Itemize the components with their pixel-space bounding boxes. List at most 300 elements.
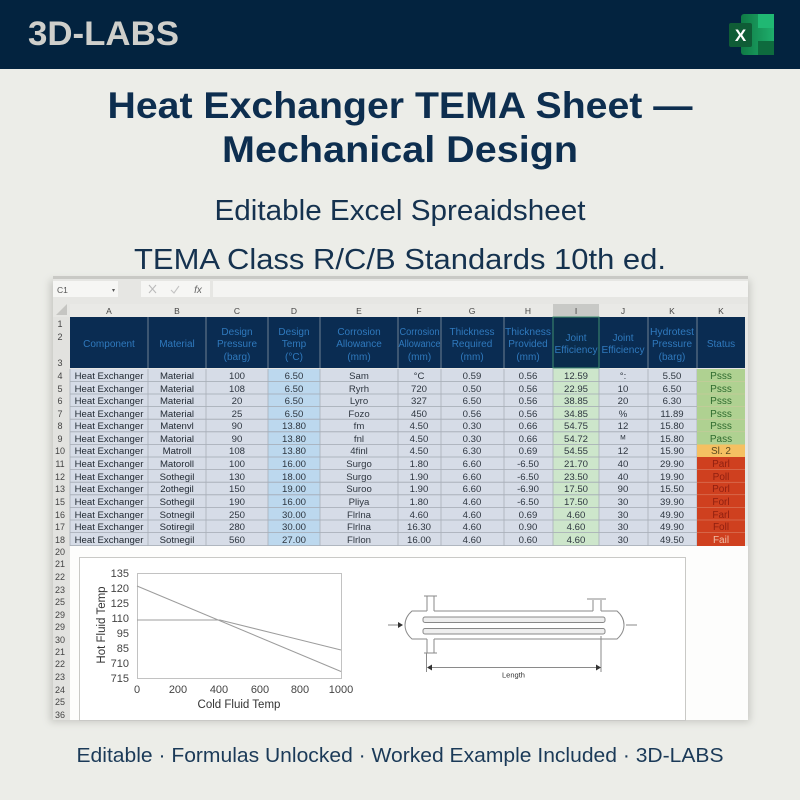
- row numbers: 4: [57, 371, 63, 381]
- status column: Psss: [710, 371, 732, 382]
- row 13: 1.90: [410, 484, 428, 495]
- row numbers: 13: [55, 484, 65, 494]
- row 13: 17.50: [564, 484, 588, 495]
- status column: Farl: [712, 510, 730, 521]
- row 12: Surgo: [346, 472, 372, 483]
- row 8: 0.30: [463, 421, 481, 432]
- row 5: [75, 384, 681, 395]
- table header row: [70, 317, 745, 368]
- row numbers: 22: [55, 572, 65, 582]
- row numbers: 1: [57, 319, 63, 329]
- row 16: Heat Exchanger: [75, 510, 144, 521]
- y axis labels: 120: [111, 583, 129, 595]
- row 8: [75, 421, 684, 432]
- table header row: Material: [159, 339, 195, 350]
- row 13: [75, 484, 684, 495]
- row 16: 250: [229, 510, 245, 521]
- row 16: 49.90: [660, 510, 684, 521]
- row 6: Lyro: [350, 396, 368, 407]
- panel: spreadsheet: [50, 276, 750, 722]
- x axis labels: 600: [251, 684, 269, 696]
- row 15: [75, 497, 684, 508]
- row 11: 40: [618, 459, 628, 470]
- row 4: °:: [620, 371, 626, 382]
- row 16: Flrlna: [347, 510, 372, 521]
- row 12: 18.00: [282, 472, 306, 483]
- row numbers: 8: [57, 421, 63, 431]
- table header row: (mm): [347, 352, 371, 363]
- table header row: Corrosion: [337, 327, 381, 338]
- row 4: [75, 371, 681, 382]
- table header row: Status: [707, 339, 735, 350]
- row numbers: 29: [55, 622, 65, 632]
- row 18: 16.00: [407, 535, 431, 546]
- y axis labels: [111, 568, 129, 685]
- column letters: K: [718, 306, 724, 316]
- row 17: 16.30: [407, 522, 431, 533]
- row 12: Sothegil: [160, 472, 194, 483]
- row 8: 90: [232, 421, 242, 432]
- row 4: 6.50: [285, 371, 303, 382]
- row 13: 150: [229, 484, 245, 495]
- row 16: 0.69: [519, 510, 537, 521]
- row 18: 30: [618, 535, 628, 546]
- column letters: A: [106, 306, 112, 316]
- row numbers: 23: [55, 672, 65, 682]
- row 18: 4.60: [567, 535, 585, 546]
- row 7: 0.56: [519, 409, 537, 420]
- row numbers: 23: [55, 585, 65, 595]
- row 8: 15.80: [660, 421, 684, 432]
- row 18: 0.60: [519, 535, 537, 546]
- row 10: 15.90: [660, 446, 684, 457]
- row 6: [75, 396, 681, 407]
- column letters: [56, 304, 748, 317]
- row 11: [75, 459, 684, 470]
- heat exchanger diagram: [388, 596, 637, 680]
- row 10: 4.50: [410, 446, 428, 457]
- row 13: Suroo: [346, 484, 372, 495]
- table header row: Efficiency: [554, 345, 598, 356]
- row 18: 27.00: [282, 535, 306, 546]
- row numbers: 18: [55, 535, 65, 545]
- row 7: Material: [160, 409, 194, 420]
- row 11: 21.70: [564, 459, 588, 470]
- row 5: 10: [618, 384, 628, 395]
- row 13: 15.50: [660, 484, 684, 495]
- status column: Psss: [710, 409, 732, 420]
- row 16: 4.60: [463, 510, 481, 521]
- row 15: 4.60: [463, 497, 481, 508]
- row 15: 17.50: [564, 497, 588, 508]
- row 11: Matoroll: [160, 459, 194, 470]
- row 16: 4.60: [567, 510, 585, 521]
- table header row: Design: [278, 327, 310, 338]
- y axis labels: 715: [111, 673, 129, 685]
- column letters: G: [469, 306, 475, 316]
- row 15: 39.90: [660, 497, 684, 508]
- row 18: Sotnegil: [160, 535, 194, 546]
- row 17: 30.00: [282, 522, 306, 533]
- length label: Length: [502, 670, 525, 680]
- row 7: 6.50: [285, 409, 303, 420]
- row 4: Sam: [349, 371, 369, 382]
- row numbers: 11: [55, 459, 65, 469]
- row 8: 4.50: [410, 421, 428, 432]
- table header row: (barg): [224, 352, 250, 363]
- shell: [405, 611, 624, 639]
- status column: Psss: [710, 384, 732, 395]
- row 8: 13.80: [282, 421, 306, 432]
- row 13: 6.60: [463, 484, 481, 495]
- row 17: 30: [618, 522, 628, 533]
- row 5: Ryrh: [349, 384, 369, 395]
- x axis labels: 0: [134, 684, 140, 696]
- logo text: 3D-LABS: [28, 15, 179, 53]
- row numbers: 25: [55, 697, 65, 707]
- row 7: 25: [232, 409, 242, 420]
- row 12: 23.50: [564, 472, 588, 483]
- row numbers: 25: [55, 597, 65, 607]
- row 12: -6.50: [517, 472, 539, 483]
- row 9: 0.30: [463, 434, 481, 445]
- row 15: Sothegil: [160, 497, 194, 508]
- table header row: (barg): [659, 352, 685, 363]
- row 5: 22.95: [564, 384, 588, 395]
- row numbers: [53, 317, 70, 720]
- row 17: Heat Exchanger: [75, 522, 144, 533]
- row 8: 12: [618, 421, 628, 432]
- row 15: Heat Exchanger: [75, 497, 144, 508]
- row numbers: 15: [55, 497, 65, 507]
- table header row: Pressure: [217, 339, 257, 350]
- row 12: 1.90: [410, 472, 428, 483]
- row 11: 1.80: [410, 459, 428, 470]
- column letters: E: [356, 306, 362, 316]
- row 12: [75, 472, 684, 483]
- status column: Foll: [713, 522, 729, 533]
- row 13: 19.00: [282, 484, 306, 495]
- table header row: Design: [221, 327, 253, 338]
- row 10: 0.69: [519, 446, 537, 457]
- row 16: Sotnegil: [160, 510, 194, 521]
- row 18: [75, 535, 684, 546]
- row 10: 12: [618, 446, 628, 457]
- row 4: 0.59: [463, 371, 481, 382]
- row 17: 4.60: [567, 522, 585, 533]
- row 13: -6.90: [517, 484, 539, 495]
- row 6: 6.30: [663, 396, 681, 407]
- row 6: Heat Exchanger: [75, 396, 144, 407]
- chart lines: [137, 586, 341, 672]
- row 10: 54.55: [564, 446, 588, 457]
- subtitle: Editable Excel Spreaidsheet: [214, 195, 586, 227]
- footer line: Editable · Formulas Unlocked · Worked Example Included · 3D-LABS: [76, 744, 724, 767]
- row 9: 15.80: [660, 434, 684, 445]
- row 11: -6.50: [517, 459, 539, 470]
- row 10: 6.30: [463, 446, 481, 457]
- status column: Sl. 2: [711, 446, 731, 457]
- column letters: F: [416, 306, 422, 316]
- row numbers: 24: [55, 685, 65, 695]
- table header row: Component: [83, 339, 135, 350]
- row 7: 34.85: [564, 409, 588, 420]
- table header row: Pressure: [652, 339, 692, 350]
- table header row: Thickness: [505, 327, 551, 338]
- formula bar: fx: [194, 285, 203, 296]
- status column: Psss: [710, 421, 732, 432]
- row 7: 0.56: [463, 409, 481, 420]
- nozzles: [424, 596, 606, 653]
- y axis labels: 125: [111, 598, 129, 610]
- row 5: 0.50: [463, 384, 481, 395]
- row 5: 6.50: [285, 384, 303, 395]
- row 10: 13.80: [282, 446, 306, 457]
- row 13: 2othegil: [160, 484, 194, 495]
- row 8: Matenvl: [160, 421, 194, 432]
- icon: excel logo: X: [735, 26, 747, 45]
- row numbers: 9: [57, 434, 63, 444]
- row 11: 6.60: [463, 459, 481, 470]
- column letters: D: [291, 306, 297, 316]
- x axis labels: 800: [291, 684, 309, 696]
- table header row: Thickness: [449, 327, 495, 338]
- y axis labels: 95: [117, 628, 129, 640]
- row 10: 4finl: [350, 446, 368, 457]
- row 4: 100: [229, 371, 245, 382]
- row 6: Material: [160, 396, 194, 407]
- status column: Psss: [710, 396, 732, 407]
- y axis labels: 110: [111, 613, 129, 625]
- standards line: TEMA Class R/C/B Standards 10th ed.: [134, 244, 666, 276]
- row 11: 16.00: [282, 459, 306, 470]
- x axis labels: 1000: [329, 684, 353, 696]
- row 11: Surgo: [346, 459, 372, 470]
- row numbers: 12: [55, 472, 65, 482]
- row numbers: 10: [55, 446, 65, 456]
- row 5: 108: [229, 384, 245, 395]
- status column: Poll: [713, 472, 729, 483]
- row numbers: 21: [55, 559, 65, 569]
- row 4: Material: [160, 371, 194, 382]
- row 9: 0.66: [519, 434, 537, 445]
- row 17: Sotiregil: [160, 522, 194, 533]
- row 15: -6.50: [517, 497, 539, 508]
- row 13: Heat Exchanger: [75, 484, 144, 495]
- row 6: 0.56: [519, 396, 537, 407]
- row 7: 450: [411, 409, 427, 420]
- row 9: Heat Exchanger: [75, 434, 144, 445]
- row 5: Heat Exchanger: [75, 384, 144, 395]
- y axis labels: 135: [111, 568, 129, 580]
- row 4: 5.50: [663, 371, 681, 382]
- row 18: Heat Exchanger: [75, 535, 144, 546]
- formula bar: [53, 281, 748, 297]
- row numbers: 29: [55, 610, 65, 620]
- row 9: 54.72: [564, 434, 588, 445]
- tubes: [423, 617, 605, 622]
- row 10: 108: [229, 446, 245, 457]
- x axis labels: [134, 684, 353, 696]
- length dimension: [426, 636, 601, 672]
- row 8: 54.75: [564, 421, 588, 432]
- panel: chart and diagram: [80, 558, 686, 720]
- row 18: Flrlon: [347, 535, 371, 546]
- row 9: 4.50: [410, 434, 428, 445]
- row 6: 6.50: [285, 396, 303, 407]
- table header row: (°C): [285, 352, 303, 363]
- table header row: Efficiency: [602, 345, 644, 356]
- row 9: 13.80: [282, 434, 306, 445]
- row numbers: 3: [57, 358, 63, 368]
- row 16: 30.00: [282, 510, 306, 521]
- flow arrows: [388, 624, 637, 626]
- row 9: fnl: [354, 434, 364, 445]
- row 5: 0.56: [519, 384, 537, 395]
- row 15: 30: [618, 497, 628, 508]
- icon: excel logo: [729, 14, 774, 55]
- row 11: 100: [229, 459, 245, 470]
- row 17: [75, 522, 684, 533]
- row numbers: 21: [55, 647, 65, 657]
- row 10: [75, 446, 684, 457]
- row 17: 280: [229, 522, 245, 533]
- status column: Forl: [712, 497, 730, 508]
- row 17: 0.90: [519, 522, 537, 533]
- row 7: [75, 409, 684, 420]
- row numbers: 20: [55, 547, 65, 557]
- table header row: (mm): [516, 352, 540, 363]
- status column: Fail: [713, 535, 729, 546]
- row 12: 6.60: [463, 472, 481, 483]
- column letters: K: [669, 306, 675, 316]
- table data rows: [70, 369, 745, 546]
- status column: Pass: [710, 434, 732, 445]
- row 5: Material: [160, 384, 194, 395]
- row 7: 11.89: [660, 409, 684, 420]
- row 10: Heat Exchanger: [75, 446, 144, 457]
- row 7: Heat Exchanger: [75, 409, 144, 420]
- status column: Parl: [712, 459, 730, 470]
- row numbers: 5: [57, 384, 63, 394]
- row 9: Matorial: [160, 434, 194, 445]
- row 15: Pliya: [349, 497, 370, 508]
- x axis labels: 400: [210, 684, 228, 696]
- header band: [0, 0, 800, 69]
- status column: [697, 369, 745, 546]
- title: Mechanical Design: [222, 129, 578, 170]
- row numbers: 36: [55, 710, 65, 720]
- row 13: 90: [618, 484, 628, 495]
- row 12: 19.90: [660, 472, 684, 483]
- table header row: (mm): [460, 352, 484, 363]
- row 11: Heat Exchanger: [75, 459, 144, 470]
- row 17: 4.60: [463, 522, 481, 533]
- row 7: %: [619, 409, 628, 420]
- row 4: 12.59: [564, 371, 588, 382]
- y axis labels: 710: [111, 658, 129, 670]
- row numbers: 22: [55, 659, 65, 669]
- row numbers: 7: [57, 409, 63, 419]
- row 12: 40: [618, 472, 628, 483]
- row 8: fm: [354, 421, 364, 432]
- column letters: B: [174, 306, 180, 316]
- x axis labels: 200: [169, 684, 187, 696]
- table header row: Required: [452, 339, 492, 350]
- row 6: 6.50: [463, 396, 481, 407]
- row 18: 560: [229, 535, 245, 546]
- row numbers: 17: [55, 522, 65, 532]
- title: [108, 85, 692, 170]
- table header row: Joint: [612, 333, 634, 344]
- line chart: [96, 568, 353, 711]
- row 4: Heat Exchanger: [75, 371, 144, 382]
- column letters: C: [234, 306, 240, 316]
- row 17: 49.90: [660, 522, 684, 533]
- row 9: [75, 434, 684, 445]
- row 15: 190: [229, 497, 245, 508]
- row 7: Fozo: [348, 409, 370, 420]
- row 18: 4.60: [463, 535, 481, 546]
- row 6: 20: [232, 396, 242, 407]
- row 4: 0.56: [519, 371, 537, 382]
- row 4: °C: [414, 371, 424, 382]
- row numbers: 2: [57, 332, 63, 342]
- title: Heat Exchanger TEMA Sheet —: [108, 85, 692, 126]
- row 16: 30: [618, 510, 628, 521]
- row 9: ᴹ: [621, 434, 626, 445]
- row 15: 16.00: [282, 497, 306, 508]
- table header row: Provided: [508, 339, 548, 350]
- table header row: Temp: [282, 339, 307, 350]
- table header row: Joint: [565, 333, 587, 344]
- row 16: [75, 510, 684, 521]
- y axis labels: 85: [117, 643, 129, 655]
- row 8: 0.66: [519, 421, 537, 432]
- table header row: Hydrotest: [650, 327, 694, 338]
- row numbers: 6: [57, 396, 63, 406]
- row 12: Heat Exchanger: [75, 472, 144, 483]
- row 6: 38.85: [564, 396, 588, 407]
- y axis title: Hot Fluid Temp: [96, 586, 108, 664]
- row 9: 90: [232, 434, 242, 445]
- white sheet area: [70, 546, 748, 720]
- row 6: 20: [618, 396, 628, 407]
- column letters: H: [525, 306, 531, 316]
- row numbers: 16: [55, 510, 65, 520]
- x axis title: Cold Fluid Temp: [198, 699, 280, 711]
- table header row: Corrosion: [400, 327, 440, 338]
- column letters: J: [621, 306, 625, 316]
- table header row: Allowance: [336, 339, 382, 350]
- row 10: Matroll: [163, 446, 191, 457]
- row 16: 4.60: [410, 510, 428, 521]
- table header row: Allowance: [398, 339, 441, 350]
- row 6: 327: [411, 396, 427, 407]
- row 17: Flrlna: [347, 522, 372, 533]
- row 8: Heat Exchanger: [75, 421, 144, 432]
- row 18: 49.50: [660, 535, 684, 546]
- row numbers: 30: [55, 635, 65, 645]
- column letters: I: [575, 306, 577, 316]
- row 5: 6.50: [663, 384, 681, 395]
- status column: Porl: [712, 484, 730, 495]
- row 5: 720: [411, 384, 427, 395]
- formula bar: ▾: [112, 288, 115, 294]
- row 11: 29.90: [660, 459, 684, 470]
- row 15: 1.80: [410, 497, 428, 508]
- table header row: (mm): [408, 352, 431, 363]
